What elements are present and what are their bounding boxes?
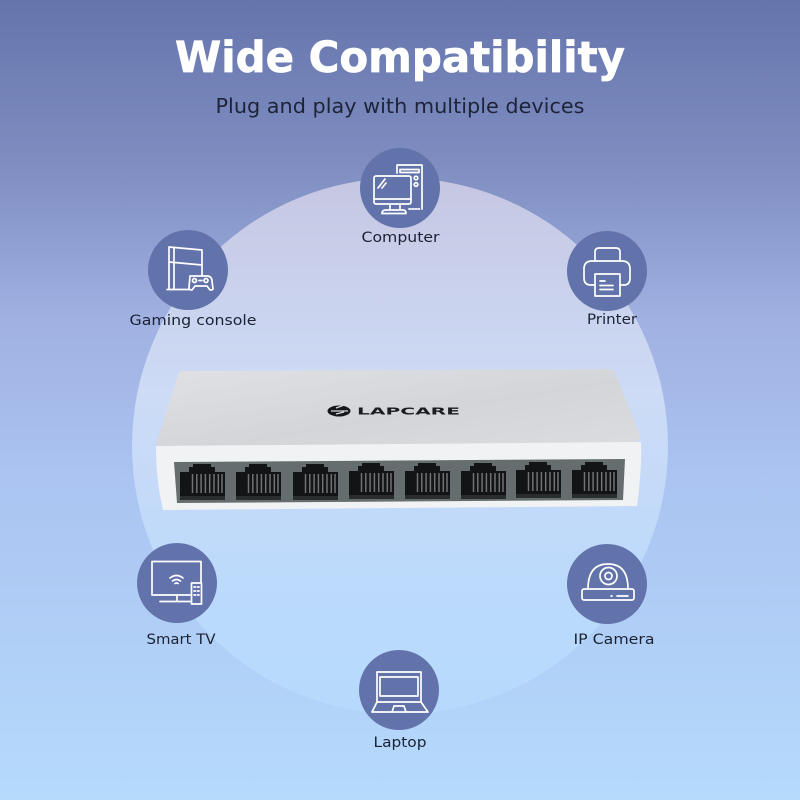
device: laptop (359, 650, 439, 751)
device: smart tv (137, 543, 217, 648)
icon badge (137, 543, 217, 623)
icon badge (359, 650, 439, 730)
label: IP Camera (574, 632, 654, 648)
device: computer (360, 148, 440, 246)
icon: gaming console (167, 247, 213, 290)
background disc (132, 178, 668, 714)
icon badge (360, 148, 440, 228)
port strip (174, 459, 625, 503)
network switch (156, 369, 641, 510)
icon badge (567, 231, 647, 311)
logo: LAPCARE (357, 406, 460, 418)
label: Smart TV (146, 632, 216, 648)
ports (180, 462, 617, 500)
title: Wide Compatibility (175, 34, 625, 83)
label: Printer (587, 312, 637, 328)
label: Laptop (374, 735, 427, 751)
icon badge (148, 230, 228, 310)
logo (328, 406, 460, 418)
switch front face (156, 442, 641, 510)
label: Gaming console (130, 313, 256, 329)
icon: ip camera (582, 564, 634, 600)
device: printer (567, 231, 647, 328)
label: Computer (362, 230, 440, 246)
device: ip camera (567, 544, 654, 648)
icon badge (567, 544, 647, 624)
device: gaming console (130, 230, 256, 329)
icon: laptop (372, 672, 428, 712)
icon: printer (584, 248, 630, 296)
switch top face (156, 369, 640, 447)
icon: computer (374, 165, 422, 214)
icon: smart tv (152, 562, 202, 604)
subtitle: Plug and play with multiple devices (216, 94, 584, 118)
